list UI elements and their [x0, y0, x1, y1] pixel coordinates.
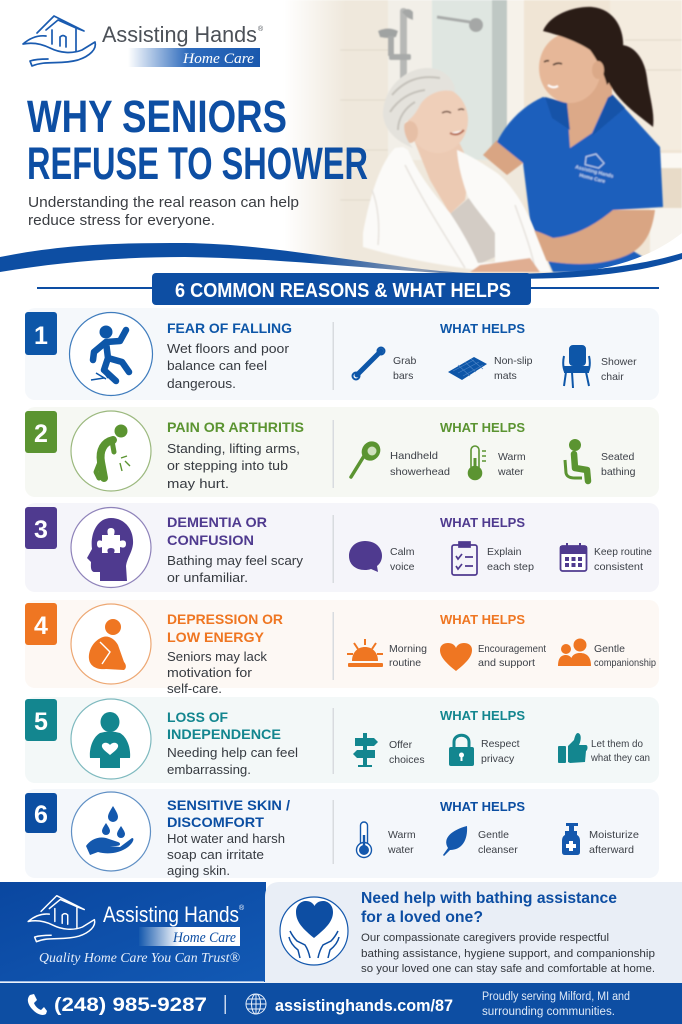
number badge 1 [25, 312, 57, 355]
reason text: INDEPENDENCE [167, 726, 281, 742]
what helps heading: WHAT HELPS [440, 708, 525, 723]
help text: explain each step [487, 546, 534, 573]
icon: water drops over hand [72, 792, 150, 871]
panel: reason 2 pain or arthritis [25, 407, 659, 497]
help text: non-slip mats: Non-slip [494, 355, 533, 367]
help text: offer choices: Offer [389, 739, 412, 751]
panel: reason 5 loss of independence [25, 697, 659, 783]
help text: warm water: water [497, 466, 524, 478]
what helps heading: WHAT HELPS [440, 515, 525, 530]
section heading: 6 COMMON REASONS & WHAT HELPS [175, 280, 511, 302]
reason text: Bathing may feel scary [167, 553, 304, 568]
reason text: CONFUSION [167, 532, 254, 548]
help text: calm voice: Calm [390, 546, 415, 558]
service area: surrounding communities. [482, 1006, 615, 1018]
icon: person slipping [70, 312, 152, 396]
reason text: PAIN OR ARTHRITIS [167, 419, 304, 435]
subtitle: reduce stress for everyone. [28, 212, 215, 229]
help text: handheld showerhead [390, 450, 450, 478]
senior woman [363, 68, 551, 272]
help text: non-slip mats: mats [494, 370, 517, 382]
help text: explain each step: Explain [487, 546, 522, 558]
reason text: aging skin. [167, 863, 230, 878]
help text: moisturize afterward: afterward [589, 844, 634, 856]
help text: gentle cleanser: cleanser [478, 844, 518, 856]
logo: Assisting Hands header: Home Care [182, 51, 254, 67]
number badge 5: 5 [34, 708, 48, 736]
panel: reason 4 depression or low energy [25, 600, 659, 696]
panel: reason 1 fear of falling [25, 308, 659, 400]
callout body: so your loved one can stay safe and comfortable at home. [361, 963, 655, 975]
icon: sitting figure hugging knees [71, 604, 151, 684]
icon: house in hand [23, 16, 95, 66]
panel: reason 3 dementia or confusion [25, 503, 659, 592]
home care strip [139, 927, 240, 946]
bathroom background [285, 0, 682, 285]
reason text: dangerous. [167, 376, 236, 391]
home care strip [128, 48, 260, 67]
phone number: (248) 985-9287 [54, 995, 207, 1016]
reason text: motivation for [167, 665, 253, 680]
help text: offer choices: choices [389, 754, 425, 766]
reason text: Wet floors and poor [167, 341, 290, 356]
icon: head with puzzle piece [71, 508, 151, 588]
reason text [167, 709, 298, 777]
help text: keep routine consistent [594, 546, 652, 573]
icon: house in hand white [28, 896, 95, 942]
wordmark: Assisting Hands [102, 22, 257, 47]
help text: gentle companionship [594, 643, 656, 669]
what helps heading: WHAT HELPS [440, 612, 525, 627]
number badge 6: 6 [34, 801, 48, 829]
number badge 4: 4 [34, 612, 48, 640]
logo: Assisting Hands header: ® [258, 25, 264, 33]
title: REFUSE TO SHOWER [27, 138, 368, 189]
callout body: bathing assistance, hygiene support, and companionship [361, 948, 655, 960]
icon: leaf [443, 826, 467, 856]
reason text: Hot water and harsh [167, 831, 285, 846]
help text: moisturize afterward: Moisturize [589, 829, 639, 841]
help text: keep routine consistent: Keep routine [594, 546, 652, 558]
help text: morning routine: routine [389, 657, 421, 669]
help text: grab bars: Grab [393, 355, 416, 367]
footer brand panel: ® [239, 904, 245, 912]
callout body [361, 932, 655, 975]
wordmark white: Assisting Hands [103, 902, 239, 927]
help text: seated bathing: bathing [601, 466, 636, 478]
help text: gentle companionship: companionship [594, 657, 656, 669]
icon: sunrise [347, 639, 383, 667]
help text: calm voice: voice [390, 561, 415, 573]
help text: keep routine consistent: consistent [594, 561, 643, 573]
reason text: Standing, lifting arms, [167, 441, 300, 456]
number badge 2: 2 [34, 420, 48, 448]
reason text [167, 797, 290, 878]
help text: encouragement and support: Encouragement [478, 643, 546, 655]
panel: reason 6 sensitive skin [25, 789, 659, 878]
reason text: DEMENTIA OR [167, 514, 267, 530]
icon: grab bar [352, 348, 384, 380]
reason text: or stepping into tub [167, 458, 288, 473]
icon: handheld showerhead [351, 438, 384, 477]
icon: lotion bottle [562, 823, 580, 855]
help text: seated bathing: Seated [601, 451, 634, 463]
icon: phone [28, 994, 47, 1015]
icon: thumbs up [558, 733, 588, 763]
footer brand panel [0, 882, 266, 982]
reason text: Seniors may lack [167, 649, 267, 664]
icon: thermometer [468, 446, 486, 480]
icon: non-slip mat [448, 357, 487, 380]
what helps heading: WHAT HELPS [440, 420, 525, 435]
number badge 2 [25, 411, 57, 453]
icon: thermometer blue [356, 822, 372, 858]
number badge 5 [25, 699, 57, 741]
caregiver [483, 7, 663, 272]
help text: handheld showerhead: showerhead [390, 466, 450, 478]
help text: warm water: Warm [498, 451, 526, 463]
reason text: LOSS OF [167, 709, 228, 725]
number badge 6 [25, 793, 57, 833]
help text: encouragement and support [478, 643, 546, 669]
website: assistinghands.com/87 [275, 997, 453, 1015]
icon: seated person [565, 439, 588, 481]
help text: explain each step: each step [487, 561, 534, 573]
help text: warm water: Warm [388, 829, 416, 841]
callout heading: for a loved one? [361, 909, 483, 926]
help text: moisturize afterward [589, 829, 639, 856]
help text: handheld showerhead: Handheld [390, 450, 438, 462]
help text: shower chair: Shower [601, 356, 637, 368]
help text: shower chair: chair [601, 371, 624, 383]
icon: signpost [353, 733, 378, 767]
help text: warm water: water [387, 844, 414, 856]
service area [482, 991, 630, 1018]
contact bar [0, 983, 682, 1024]
icon: bent person in pain [71, 411, 151, 491]
logo: Assisting Hands header [23, 16, 264, 67]
help text: respect privacy: privacy [481, 753, 515, 765]
tagline: Quality Home Care You Can Trust® [39, 950, 240, 965]
help text: respect privacy: Respect [481, 738, 520, 750]
icon: person holding heart [71, 699, 151, 779]
number badge 4 [25, 603, 57, 645]
icon: two people [558, 638, 591, 666]
reason text: DEPRESSION OR [167, 611, 283, 627]
icon: speech bubble [349, 541, 382, 572]
reason text: Needing help can feel [167, 745, 298, 760]
title: WHY SENIORS [27, 91, 287, 142]
reason text [167, 611, 283, 696]
header photo: caregiver and senior in bathroom [284, 0, 682, 285]
icon: shower chair [563, 346, 590, 388]
reason text [167, 419, 304, 491]
shirt logo [573, 150, 618, 187]
help text: grab bars: bars [393, 370, 413, 382]
callout heading [361, 890, 617, 926]
icon: heart in hands [280, 897, 348, 965]
reason text: or unfamiliar. [167, 570, 248, 585]
title [27, 91, 368, 189]
number badge 3 [25, 507, 57, 549]
help text: gentle companionship: Gentle [594, 643, 625, 655]
help text: encouragement and support: and support [478, 657, 535, 669]
reason text: soap can irritate [167, 847, 264, 862]
icon: globe [246, 994, 266, 1014]
shirt logo: Assisting Hands [574, 164, 614, 180]
help text: let them do what they can [590, 738, 650, 764]
white area below swoosh [0, 256, 682, 310]
callout heading: Need help with bathing assistance [361, 890, 617, 907]
reason text: may hurt. [167, 476, 229, 491]
icon: calendar [560, 543, 587, 571]
reason text: LOW ENERGY [167, 629, 265, 645]
icon: heart [440, 643, 472, 671]
reason text: self-care. [167, 681, 222, 696]
callout body: Our compassionate caregivers provide respectful [361, 932, 609, 944]
service area: Proudly serving Milford, MI and [482, 991, 630, 1003]
help text: let them do what they can: what they can [590, 752, 650, 764]
swoosh accents [0, 233, 682, 279]
reason text: DISCOMFORT [167, 814, 264, 830]
reason text: embarrassing. [167, 762, 251, 777]
number badge 3: 3 [34, 516, 48, 544]
number badge 1: 1 [34, 322, 48, 350]
callout: need help with bathing [265, 882, 682, 983]
help text: gentle cleanser: Gentle [478, 829, 509, 841]
section heading [37, 273, 659, 305]
footer brand panel: Home Care [172, 930, 237, 946]
reason text: balance can feel [167, 358, 267, 373]
reason text: SENSITIVE SKIN / [167, 797, 290, 813]
help text: morning routine: Morning [389, 643, 427, 655]
subtitle: Understanding the real reason can help [28, 194, 299, 211]
subtitle [28, 194, 299, 229]
help text: let them do what they can: Let them do [591, 738, 643, 750]
shirt logo: Home Care [579, 173, 606, 185]
reason text [167, 320, 292, 391]
icon: clipboard checklist [452, 542, 477, 575]
icon: padlock [449, 735, 474, 766]
reason text: FEAR OF FALLING [167, 320, 292, 336]
what helps heading: WHAT HELPS [440, 321, 525, 336]
reason text [167, 514, 304, 585]
white fade into page [284, 0, 346, 285]
what helps heading: WHAT HELPS [440, 799, 525, 814]
